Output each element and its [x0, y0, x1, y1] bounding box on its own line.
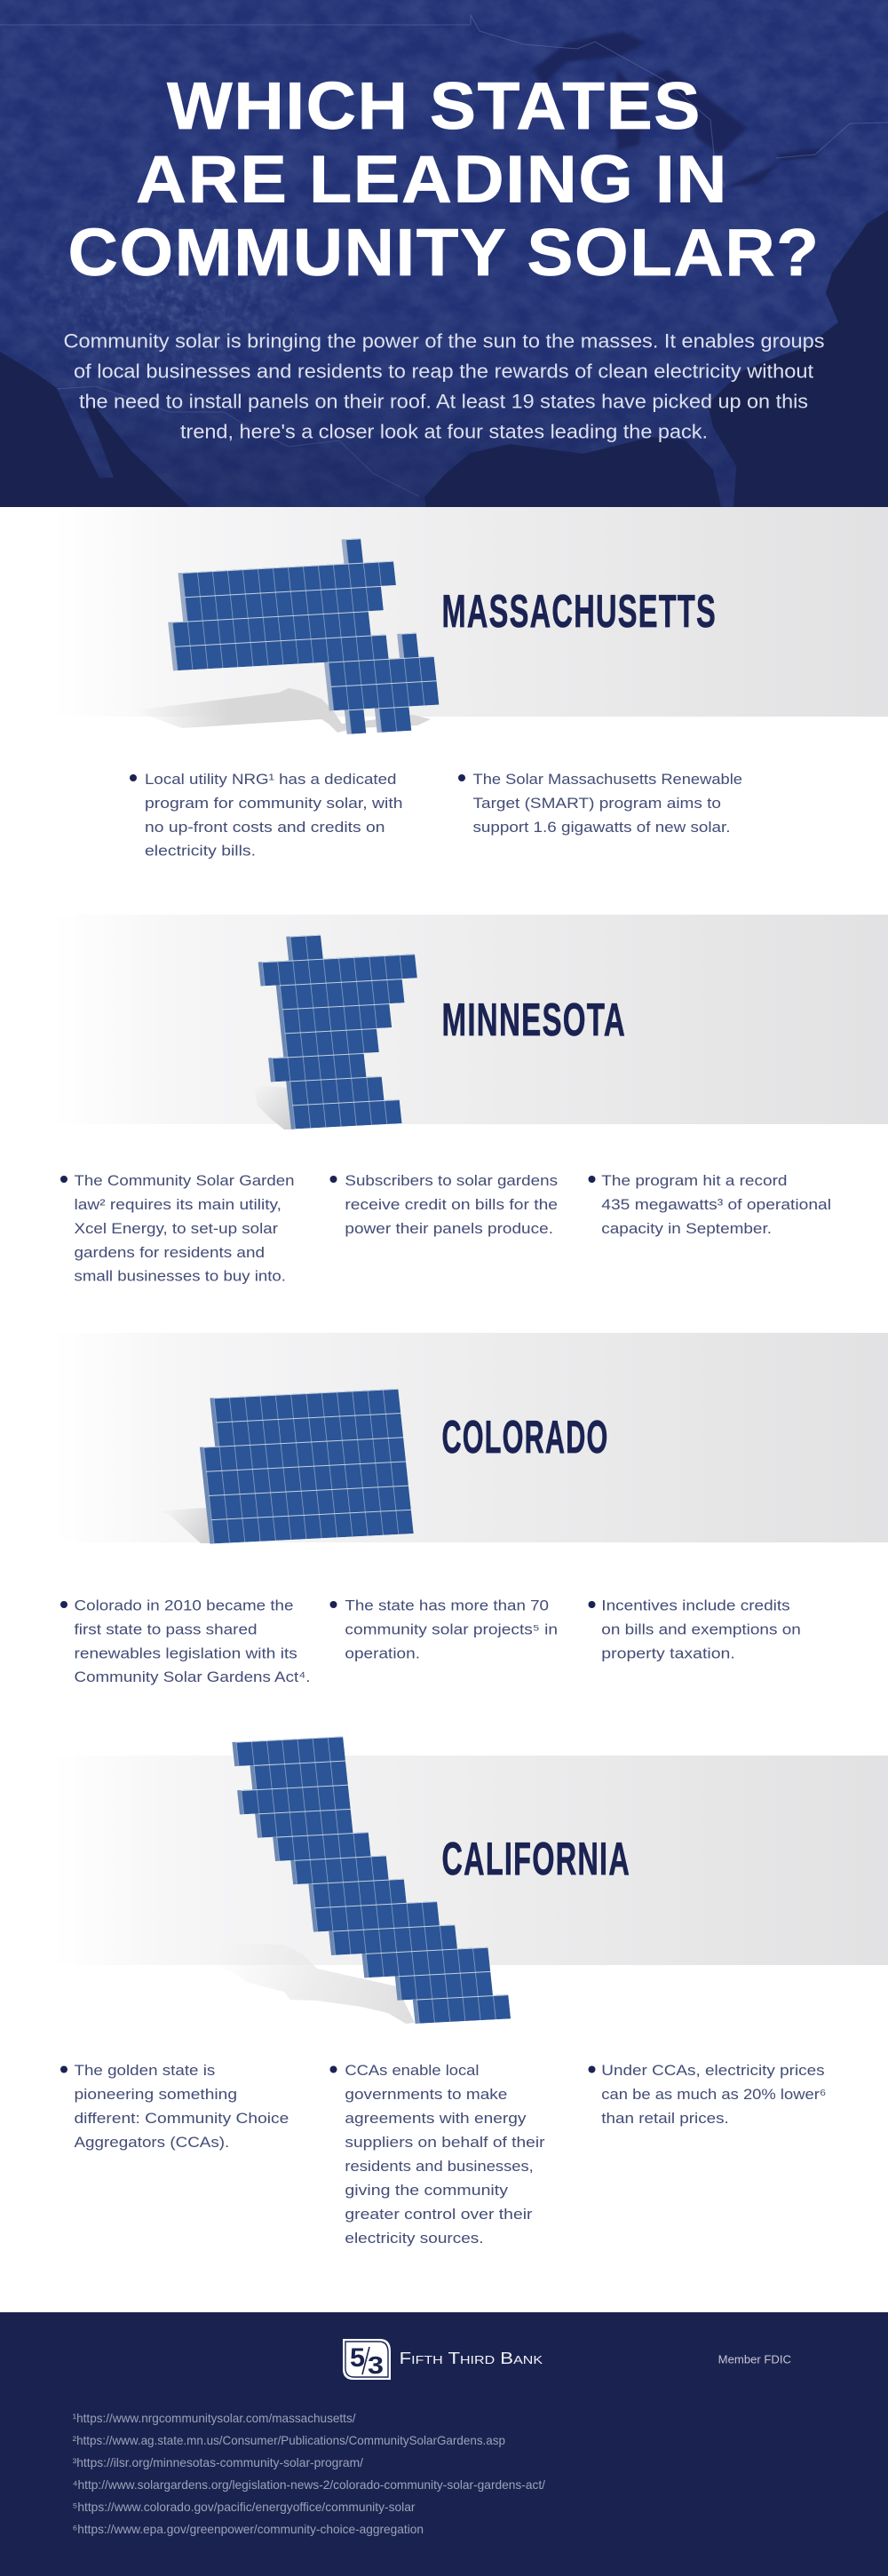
intro paragraph: of local businesses and residents to reap the rewards of clean electricity without	[74, 361, 814, 382]
title: ARE LEADING IN	[136, 142, 728, 217]
footnotes: ⁶https://www.epa.gov/greenpower/community-choice-aggregation	[73, 2522, 424, 2536]
bullet: NRG program: no up-front costs and credits on	[145, 819, 385, 836]
bullet: SMART program: The Solar Massachusetts Renewable	[472, 771, 742, 788]
hero panel	[0, 0, 888, 508]
bullet: 2010 legislation: renewables legislation with its	[75, 1645, 297, 1662]
footnotes: ³https://ilsr.org/minnesotas-community-solar-program/	[73, 2455, 363, 2469]
bullet: record capacity: 435 megawatts³ of operational	[601, 1196, 831, 1213]
bullet: 70 projects	[330, 1597, 558, 1662]
bullet: incentives: on bills and exemptions on	[601, 1621, 801, 1637]
footnotes: ⁵https://www.colorado.gov/pacific/energyoffice/community-solar	[73, 2500, 416, 2514]
bullet: how CCAs work	[330, 2062, 545, 2247]
title: COMMUNITY SOLAR?	[67, 215, 821, 289]
panel: Minnesota	[0, 915, 888, 1284]
bullet: Community Solar Garden law: gardens for residents and	[75, 1244, 265, 1261]
bullet: Community Solar Garden law: law² requires its main utility,	[75, 1196, 281, 1213]
panel shadow	[213, 1942, 415, 2024]
bullet: CCAs intro: Aggregators (CCAs).	[75, 2134, 229, 2151]
bullet: lower prices	[588, 2062, 826, 2127]
bullet: subscribers	[330, 1172, 558, 1237]
bullet: how CCAs work: electricity sources.	[345, 2230, 484, 2247]
icon: solar panel state map	[232, 1729, 511, 2032]
bullet: 2010 legislation: first state to pass shared	[75, 1621, 258, 1637]
bullet: 2010 legislation	[60, 1597, 311, 1685]
bullet: CCAs intro: The golden state is	[75, 2062, 215, 2079]
bullet: NRG program	[130, 771, 403, 860]
bullet: how CCAs work: giving the community	[345, 2182, 509, 2199]
bullet: NRG program: program for community solar, with	[145, 795, 403, 812]
member FDIC: Member FDIC	[718, 2353, 791, 2366]
bullet: SMART program: Target (SMART) program aims to	[472, 795, 721, 812]
bullet: Community Solar Garden law	[60, 1172, 295, 1284]
bullet: how CCAs work: greater control over their	[345, 2206, 533, 2223]
heading: MASSACHUSETTS	[442, 586, 717, 638]
icon: solar panel state map	[161, 535, 441, 743]
bullet: record capacity	[588, 1172, 831, 1237]
panel: Massachusetts	[0, 507, 888, 860]
bullet: Community Solar Garden law: The Community Solar Garden	[75, 1172, 295, 1189]
footer background	[0, 2312, 888, 2576]
footnotes	[73, 2411, 545, 2536]
bullet: Community Solar Garden law: small businesses to buy into.	[75, 1268, 286, 1284]
panel: California	[0, 1729, 888, 2247]
heading: MINNESOTA	[442, 995, 626, 1046]
footer panel	[0, 2312, 888, 2576]
icon: Fifth Third Bank logo	[343, 2339, 391, 2380]
footnotes: ²https://www.ag.state.mn.us/Consumer/Publications/CommunitySolarGardens.asp	[73, 2433, 505, 2447]
bullet: how CCAs work: governments to make	[345, 2086, 507, 2103]
intro paragraph: the need to install panels on their roof. At least 19 states have picked up on this	[79, 391, 808, 412]
header band	[0, 915, 888, 1124]
bullet: incentives: Incentives include credits	[601, 1597, 790, 1614]
header band	[0, 1756, 888, 1965]
bullet: lower prices: Under CCAs, electricity prices	[601, 2062, 825, 2079]
bullet: how CCAs work: residents and businesses,	[345, 2158, 534, 2175]
title	[67, 68, 821, 289]
bullet: record capacity: The program hit a record	[601, 1172, 787, 1189]
intro paragraph	[64, 330, 824, 442]
panel shadow	[253, 1085, 295, 1129]
bullet: incentives	[588, 1597, 801, 1662]
header band	[0, 507, 888, 717]
icon: solar panel state map	[194, 1389, 414, 1544]
map background	[0, 0, 888, 508]
panel: Colorado	[0, 1333, 888, 1685]
bullet: how CCAs work: agreements with energy	[345, 2110, 527, 2127]
intro paragraph: trend, here's a closer look at four states leading the pack.	[180, 421, 708, 442]
bullet: SMART program	[458, 771, 742, 836]
bullet: lower prices: than retail prices.	[601, 2110, 729, 2127]
bullet: 2010 legislation: Colorado in 2010 became the	[75, 1597, 293, 1614]
bullet: how CCAs work: CCAs enable local	[345, 2062, 480, 2079]
panel shadow	[133, 688, 431, 733]
heading: CALIFORNIA	[442, 1834, 630, 1885]
bullet: NRG program: Local utility NRG¹ has a dedicated	[145, 771, 396, 788]
bullet: incentives: property taxation.	[601, 1645, 735, 1662]
title: WHICH STATES	[167, 68, 702, 143]
bullet: 2010 legislation: Community Solar Gardens Act⁴.	[75, 1668, 311, 1685]
intro paragraph: Community solar is bringing the power of the sun to the masses. It enables groups	[64, 330, 824, 352]
heading: COLORADO	[442, 1412, 609, 1463]
footnotes: ¹https://www.nrgcommunitysolar.com/massachusetts/	[73, 2411, 356, 2425]
panel shadow	[153, 1508, 211, 1543]
bank name: Fifth Third Bank	[400, 2350, 543, 2367]
bullet: CCAs intro: pioneering something	[75, 2086, 237, 2103]
header band	[0, 1333, 888, 1542]
bullet: 70 projects: community solar projects⁵ in	[345, 1621, 558, 1637]
bullet: 70 projects: operation.	[345, 1645, 420, 1662]
bullet: Community Solar Garden law: Xcel Energy, to set-up solar	[75, 1220, 278, 1237]
bullet: SMART program: support 1.6 gigawatts of new solar.	[472, 819, 730, 836]
bullet: CCAs intro	[60, 2062, 289, 2151]
bullet: subscribers: Subscribers to solar gardens	[345, 1172, 558, 1189]
bullet: record capacity: capacity in September.	[601, 1220, 772, 1237]
icon: solar panel state map	[256, 930, 432, 1130]
bullet: lower prices: can be as much as 20% lower⁶	[601, 2086, 826, 2103]
bullet: NRG program: electricity bills.	[145, 842, 256, 860]
bullet: 70 projects: The state has more than 70	[345, 1597, 549, 1614]
bullet: CCAs intro: different: Community Choice	[75, 2110, 289, 2127]
icon: Fifth Third Bank logo: 5	[350, 2343, 365, 2373]
bullet: subscribers: receive credit on bills for the	[345, 1196, 558, 1213]
bullet: how CCAs work: suppliers on behalf of their	[345, 2134, 545, 2151]
bullet: subscribers: power their panels produce.	[345, 1220, 553, 1237]
icon: Fifth Third Bank logo: 3	[368, 2351, 384, 2379]
footnotes: ⁴http://www.solargardens.org/legislation-news-2/colorado-community-solar-gardens-act/	[73, 2477, 545, 2492]
